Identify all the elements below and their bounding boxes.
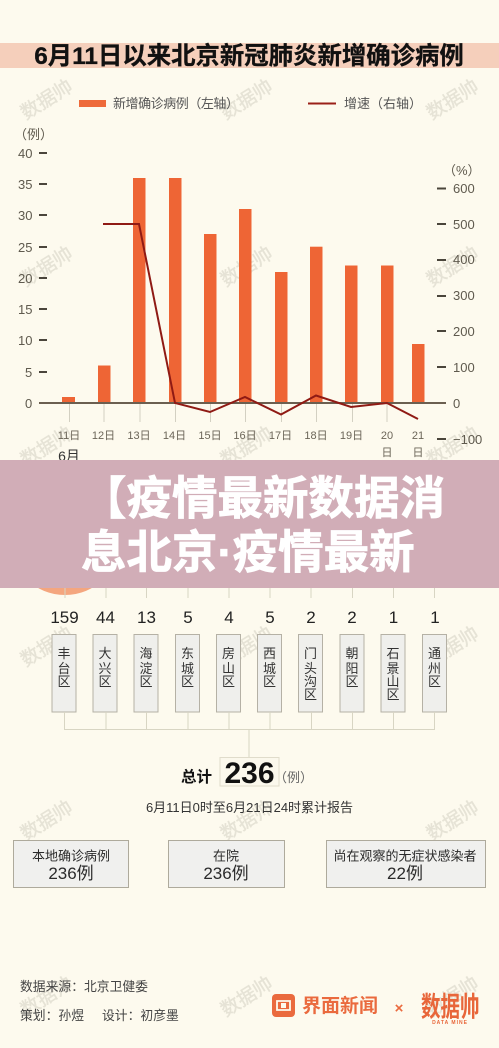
朝阳区 (340, 634, 364, 712)
multiply sign: × (395, 1000, 404, 1017)
海淀区 (134, 634, 158, 712)
朝阳区: 阳 (345, 661, 359, 676)
x axis labels: 21 (412, 430, 424, 442)
watermarks: 数据帅 (217, 422, 277, 471)
watermarks: 数据帅 (217, 972, 277, 1021)
watermarks: 数据帅 (217, 75, 277, 124)
district counts: 1 (430, 608, 440, 627)
watermarks: 数据帅 (423, 422, 483, 471)
朝阳区: 区 (345, 674, 359, 689)
东城区: 东 (181, 646, 194, 661)
card: local confirmed: 236例 (48, 864, 94, 883)
西城区: 区 (263, 674, 276, 689)
logo: Jiemian News (272, 994, 378, 1017)
海淀区: 区 (139, 674, 153, 689)
title: 6月11日以来北京新冠肺炎新增确诊病例 (34, 43, 464, 70)
reporting period: 6月11日0时至6月21日24时累计报告 (146, 800, 353, 815)
石景山区 (381, 634, 405, 712)
x axis labels: 15日 (198, 430, 222, 442)
x axis labels: 20 (381, 430, 393, 442)
left axis: 10 (18, 333, 32, 348)
watermarks: 数据帅 (423, 622, 483, 671)
x axis labels: 17日 (269, 430, 292, 442)
icon: Jiemian (272, 994, 295, 1017)
x axis labels: 16日 (233, 430, 257, 442)
overlay banner: 【疫情最新数据消 (81, 473, 445, 524)
district counts: 4 (224, 608, 234, 627)
district counts: 5 (183, 608, 193, 627)
source and credits (20, 979, 179, 1023)
logo: Data Mine: 数据帅 (421, 992, 480, 1023)
district counts (50, 608, 440, 627)
西城区: 西 (263, 646, 276, 661)
门头沟区: 区 (304, 687, 317, 702)
watermarks: 数据帅 (423, 242, 483, 291)
朝阳区: 朝 (345, 646, 359, 661)
left axis (14, 127, 53, 411)
right axis: 400 (453, 252, 475, 267)
card: local confirmed: 本地确诊病例 (32, 848, 110, 864)
total: （例） (274, 770, 313, 785)
left axis: 25 (18, 240, 32, 255)
x axis ticks (69, 404, 388, 422)
right axis: 600 (453, 181, 475, 196)
legend: 增速（右轴） (344, 96, 422, 111)
通州区: 州 (428, 661, 441, 676)
right axis: 100 (453, 360, 475, 375)
left axis: 40 (18, 146, 32, 161)
x axis labels: 日 (412, 447, 424, 459)
x axis labels: 13日 (127, 430, 151, 442)
门头沟区: 门 (304, 646, 317, 661)
left axis: （例） (14, 127, 53, 142)
门头沟区 (298, 634, 322, 712)
x axis labels: 6月 (58, 448, 80, 464)
combo chart (14, 127, 482, 464)
right axis: 300 (453, 288, 475, 303)
watermarks: 数据帅 (423, 75, 483, 124)
right axis: 0 (453, 396, 460, 411)
district boxes (52, 634, 446, 712)
海淀区: 淀 (139, 661, 153, 676)
丰台区: 丰 (57, 646, 71, 661)
source and credits: 数据来源：北京卫健委 (20, 979, 148, 994)
大兴区 (93, 634, 117, 712)
total (181, 757, 313, 790)
大兴区: 区 (98, 674, 112, 689)
card: asymptomatic (326, 840, 486, 888)
watermarks: 数据帅 (423, 796, 483, 845)
西城区 (258, 634, 282, 712)
left axis: 15 (18, 302, 32, 317)
门头沟区: 沟 (304, 674, 317, 689)
logo: Data Mine: DATA MINE (432, 1020, 468, 1026)
通州区 (422, 634, 446, 712)
门头沟区: 头 (304, 661, 317, 676)
watermarks: 数据帅 (423, 972, 483, 1021)
right axis: （%） (443, 163, 481, 178)
x axis labels: 14日 (163, 430, 186, 442)
peach circle (10, 485, 120, 595)
海淀区: 海 (139, 646, 153, 661)
watermarks: 数据帅 (217, 242, 277, 291)
card: asymptomatic: 22例 (387, 864, 423, 883)
source and credits: 设计：初彦墨 (102, 1008, 179, 1023)
房山区: 山 (222, 661, 235, 676)
overlay banner: 息北京·疫情最新 (81, 527, 415, 578)
right axis: 500 (453, 217, 475, 232)
东城区: 城 (181, 661, 194, 676)
x axis labels: 18日 (304, 430, 328, 442)
card: hospitalized (168, 840, 284, 888)
东城区: 区 (181, 674, 194, 689)
right axis: −100 (453, 432, 482, 447)
card: hospitalized: 在院 (213, 848, 239, 864)
x axis labels: 11日 (58, 430, 80, 442)
left axis: 30 (18, 208, 32, 223)
房山区: 区 (222, 674, 235, 689)
card: hospitalized: 236例 (203, 864, 249, 883)
overlay banner (0, 460, 499, 588)
district counts: 5 (265, 608, 275, 627)
bars: new confirmed cases (62, 178, 424, 403)
district counts: 44 (96, 608, 115, 627)
source and credits: 策划：孙煜 (20, 1008, 84, 1023)
total: 236 (224, 757, 275, 790)
left axis: 5 (25, 365, 32, 380)
right axis: 200 (453, 324, 475, 339)
district connectors top (64, 588, 435, 598)
x axis labels (58, 430, 424, 464)
growth rate line (103, 224, 418, 419)
大兴区: 兴 (98, 661, 112, 676)
card: local confirmed (14, 840, 128, 888)
watermarks: 数据帅 (17, 422, 77, 471)
total: 总计 (181, 767, 212, 786)
watermarks: 数据帅 (17, 796, 77, 845)
legend: 新增确诊病例（左轴） (113, 96, 239, 111)
logo: Jiemian News: 界面新闻 (302, 995, 378, 1017)
card: asymptomatic: 尚在观察的无症状感染者 (333, 848, 477, 864)
district counts: 2 (347, 608, 357, 627)
district connectors bottom (64, 712, 435, 757)
district counts: 2 (306, 608, 316, 627)
西城区: 城 (263, 661, 276, 676)
legend (79, 96, 422, 111)
房山区 (216, 634, 240, 712)
watermarks: 数据帅 (17, 75, 77, 124)
石景山区: 景 (386, 661, 400, 676)
丰台区: 区 (57, 674, 71, 689)
x axis labels: 12日 (92, 430, 115, 442)
watermarks: 数据帅 (17, 972, 77, 1021)
zero baseline (39, 402, 446, 404)
left axis: 35 (18, 177, 32, 192)
right axis (437, 163, 482, 447)
石景山区: 石 (386, 646, 400, 661)
通州区: 通 (428, 646, 441, 661)
watermarks: 数据帅 (217, 622, 277, 671)
watermarks: 数据帅 (217, 796, 277, 845)
left axis: 0 (25, 396, 32, 411)
district counts: 159 (50, 608, 79, 627)
东城区 (176, 634, 200, 712)
丰台区: 台 (57, 661, 71, 676)
district counts: 1 (389, 608, 398, 627)
大兴区: 大 (98, 646, 112, 661)
left axis: 20 (18, 271, 32, 286)
丰台区 (52, 634, 76, 712)
watermarks: 数据帅 (17, 622, 77, 671)
x axis labels: 19日 (340, 430, 363, 442)
石景山区: 区 (386, 687, 400, 702)
watermarks: 数据帅 (17, 242, 77, 291)
x axis labels: 日 (382, 447, 392, 459)
district counts: 13 (137, 608, 156, 627)
通州区: 区 (428, 674, 441, 689)
石景山区: 山 (386, 674, 400, 689)
房山区: 房 (222, 646, 235, 661)
